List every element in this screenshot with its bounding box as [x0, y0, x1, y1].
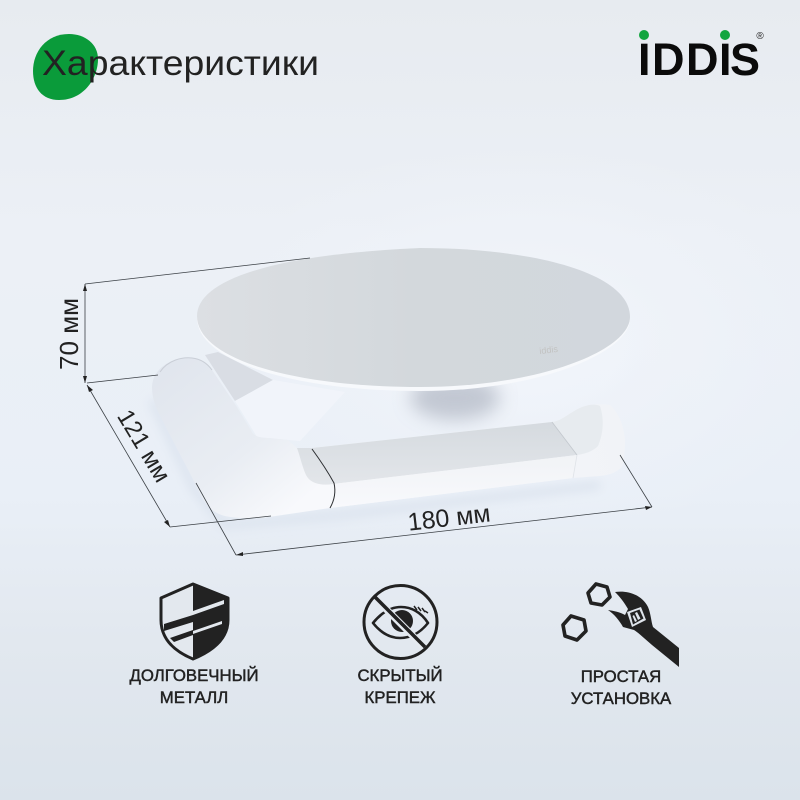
shelf disc: [197, 248, 630, 391]
bar trough: [297, 422, 577, 485]
dimension 121 mm: 121 мм: [111, 405, 176, 487]
shadow under shelf: [410, 376, 500, 420]
engraved brand mark: iddis: [539, 344, 559, 356]
green blob behind title: [33, 34, 98, 100]
dimension 180 mm: [196, 455, 652, 556]
label: hidden fastening: КРЕПЕЖ: [365, 688, 436, 707]
bar front face: [330, 455, 577, 508]
label: simple installation: УСТАНОВКА: [571, 689, 672, 708]
dimension 180 mm: 180 мм: [406, 499, 492, 537]
logo: IDDIS: IDDIS: [638, 34, 760, 85]
product: toilet paper holder: [152, 248, 630, 525]
bar and end cap body: [312, 404, 625, 508]
title: Характеристики: [42, 44, 319, 83]
dimension 70 mm: 70 мм: [54, 298, 84, 370]
icon: shield: [161, 584, 228, 659]
soft shadow around holder: [152, 400, 600, 525]
label: hidden fastening: СКРЫТЫЙ: [357, 666, 443, 685]
logo: IDDIS: ®: [756, 31, 764, 42]
bar end cap recess: [552, 405, 603, 455]
holder arm and bar body: [152, 358, 330, 518]
dimension 70 mm: [54, 258, 310, 383]
icon: crossed-out eye: [364, 586, 437, 658]
label: simple installation: ПРОСТАЯ: [581, 667, 661, 686]
icon: wrench and nuts: [563, 584, 679, 667]
arm top edge highlight: [160, 358, 212, 372]
wall bracket under shelf: [205, 352, 273, 401]
label: durable metal: МЕТАЛЛ: [160, 688, 228, 707]
bar seam lines: [312, 422, 577, 508]
label: durable metal: ДОЛГОВЕЧНЫЙ: [129, 666, 259, 685]
dimension 121 mm: [87, 385, 271, 527]
